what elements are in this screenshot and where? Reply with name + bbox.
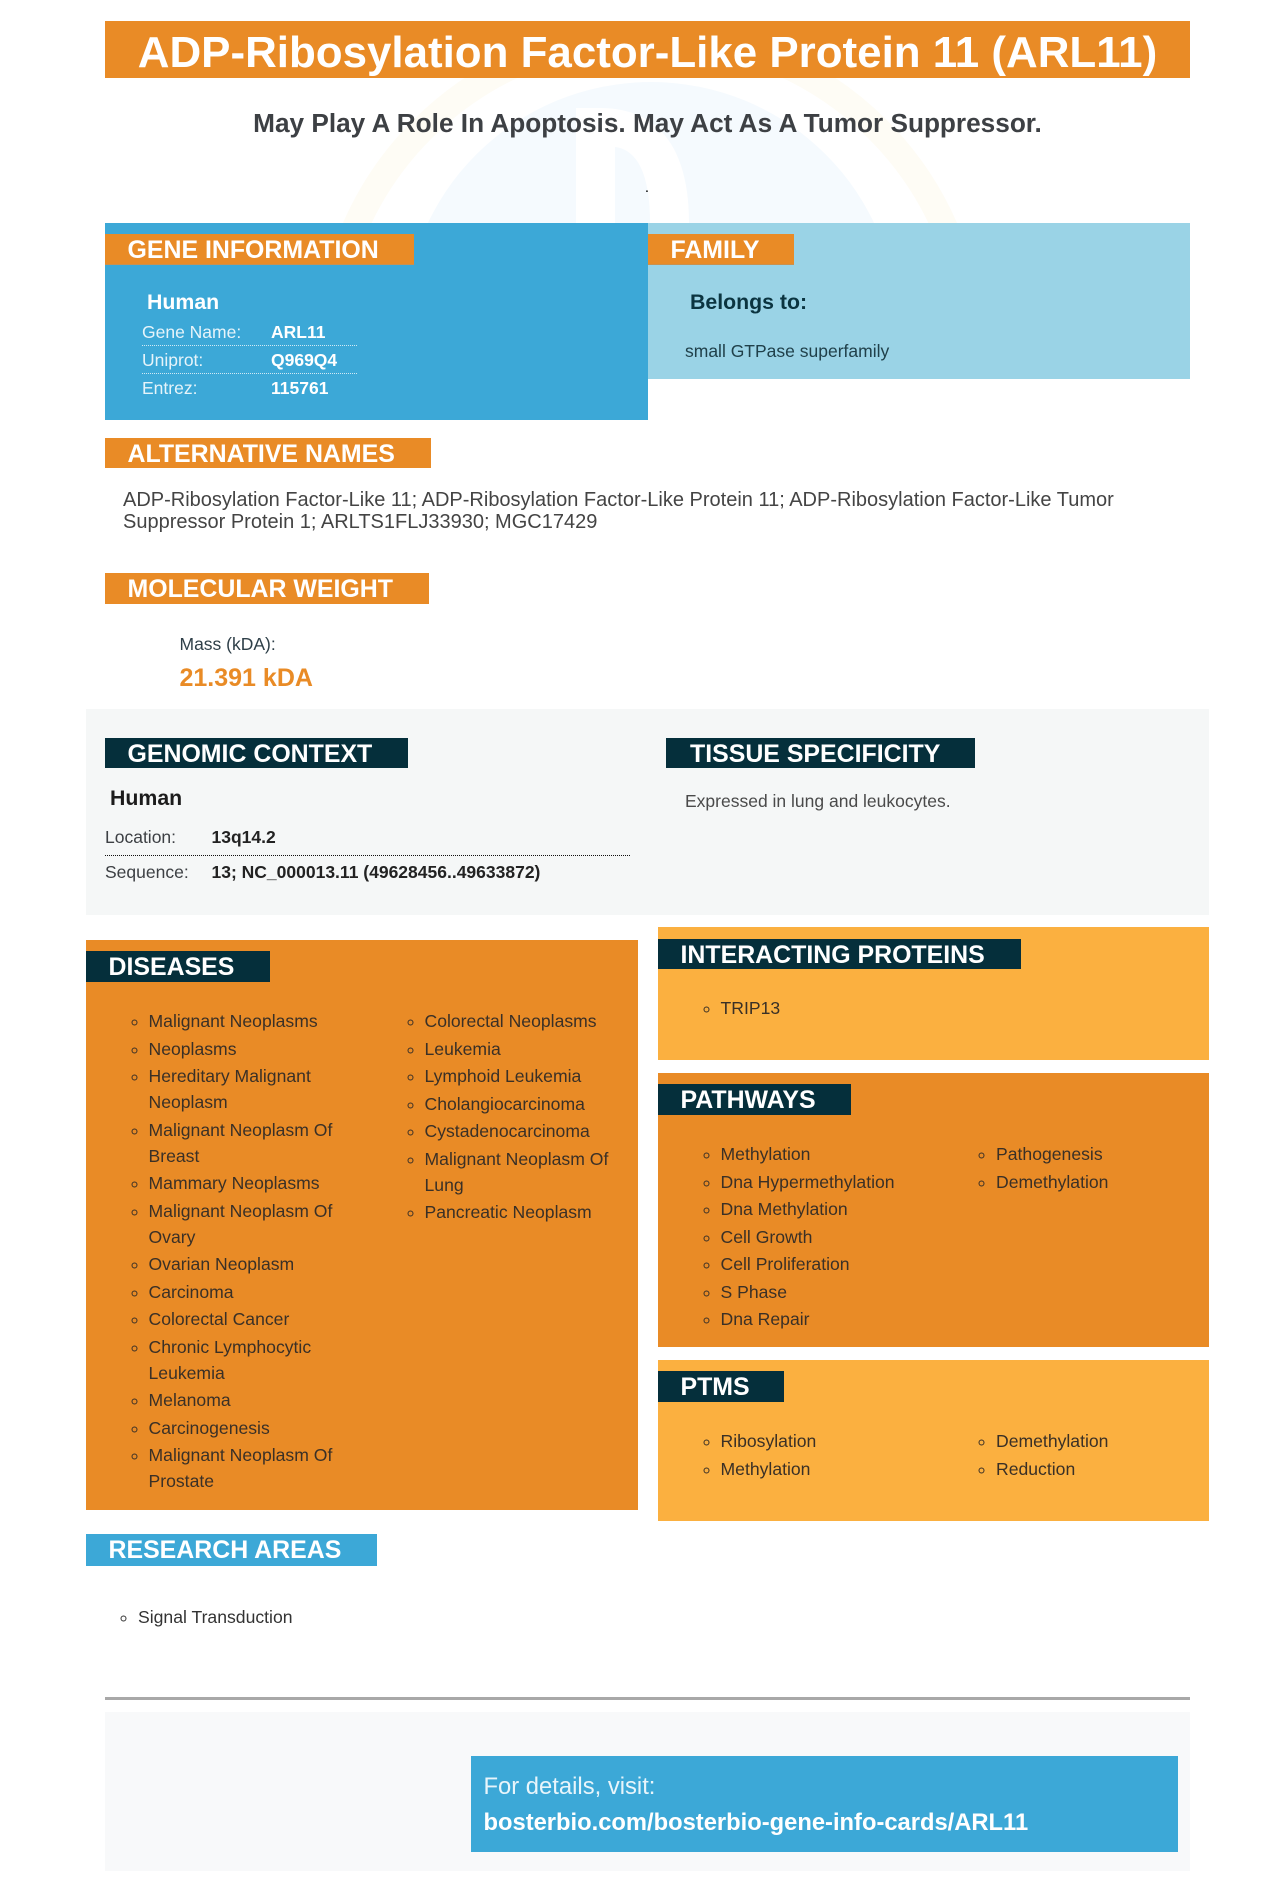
diseases list column 1: Malignant Neoplasms bbox=[148, 1011, 318, 1031]
diseases list column 1: Carcinogenesis bbox=[148, 1418, 270, 1438]
uniprot row: Uniprot: bbox=[142, 350, 203, 370]
diseases list column 2 bbox=[408, 1011, 608, 1222]
diseases list column 1: Breast bbox=[148, 1146, 199, 1166]
ptms list column 2: Reduction bbox=[996, 1459, 1075, 1479]
family value: small GTPase superfamily bbox=[685, 341, 889, 361]
pathways list column 1: Dna Hypermethylation bbox=[720, 1172, 895, 1192]
diseases list column 1: Neoplasms bbox=[148, 1039, 237, 1059]
location row: 13q14.2 bbox=[212, 827, 276, 847]
diseases list column 1: Malignant Neoplasm Of bbox=[148, 1445, 332, 1465]
uniprot row bbox=[142, 348, 357, 374]
species label: Human bbox=[147, 290, 219, 314]
heading: research areas: RESEARCH AREAS bbox=[108, 1536, 341, 1564]
diseases list column 1 bbox=[132, 1011, 332, 1491]
entrez row bbox=[142, 378, 328, 398]
belongs to label: Belongs to: bbox=[690, 290, 807, 314]
diseases list column 2: Lung bbox=[424, 1175, 464, 1195]
heading: ptms bbox=[658, 1371, 784, 1402]
ptms list column 1 bbox=[704, 1431, 816, 1479]
research areas list: Signal Transduction bbox=[138, 1607, 293, 1627]
panel: pathways bbox=[658, 1073, 1209, 1347]
diseases list column 2: Lymphoid Leukemia bbox=[424, 1066, 581, 1086]
diseases list column 1: Prostate bbox=[148, 1471, 214, 1491]
species label: Human bbox=[110, 786, 182, 810]
heading: family: FAMILY bbox=[670, 236, 759, 264]
heading: diseases bbox=[86, 951, 270, 982]
heading: alternative names: ALTERNATIVE NAMES bbox=[128, 440, 395, 468]
diseases list column 1: Chronic Lymphocytic bbox=[148, 1337, 311, 1357]
tissue specificity text: Expressed in lung and leukocytes. bbox=[685, 791, 951, 811]
location row: Location: bbox=[105, 827, 176, 847]
diseases list column 2: Colorectal Neoplasms bbox=[424, 1011, 597, 1031]
alternative names text: ADP-Ribosylation Factor-Like 11; ADP-Ribosylation Factor-Like Protein 11; ADP-Ribosylation Factor-Like Tumor bbox=[123, 489, 1114, 511]
diseases list column 1: Ovary bbox=[148, 1227, 195, 1247]
panel: genomic context and tissue specificity bbox=[86, 709, 1209, 915]
panel: footer bbox=[105, 1712, 1190, 1871]
heading: pathways bbox=[658, 1084, 851, 1115]
pathways list column 2 bbox=[978, 1144, 1108, 1192]
sequence row: 13; NC_000013.11 (49628456..49633872) bbox=[212, 862, 540, 882]
uniprot row: Q969Q4 bbox=[271, 350, 337, 370]
diseases list column 2: Cystadenocarcinoma bbox=[424, 1121, 590, 1141]
dot: . bbox=[645, 179, 649, 196]
title: ADP-Ribosylation Factor-Like Protein 11 (ARL11) bbox=[138, 28, 1157, 77]
heading: family bbox=[648, 234, 794, 265]
diseases list column 1: Leukemia bbox=[148, 1363, 225, 1383]
heading: molecular weight: MOLECULAR WEIGHT bbox=[128, 575, 393, 603]
panel: ptms bbox=[658, 1360, 1209, 1521]
footer divider bbox=[105, 1697, 1190, 1700]
pathways list column 1: Methylation bbox=[720, 1144, 810, 1164]
sequence row: Sequence: bbox=[105, 862, 189, 882]
panel: interacting proteins bbox=[658, 927, 1209, 1060]
heading: interacting proteins: INTERACTING PROTEINS bbox=[680, 941, 985, 969]
diseases list column 1: Melanoma bbox=[148, 1390, 231, 1410]
pathways list column 1: Cell Proliferation bbox=[720, 1254, 850, 1274]
diseases list column 1: Malignant Neoplasm Of bbox=[148, 1201, 332, 1221]
diseases list column 1: Carcinoma bbox=[148, 1282, 234, 1302]
ptms list column 1: Ribosylation bbox=[720, 1431, 816, 1451]
gene name row bbox=[142, 320, 357, 346]
heading: genomic context: GENOMIC CONTEXT bbox=[128, 740, 372, 768]
pathways list column 1: S Phase bbox=[720, 1282, 787, 1302]
panel: family bbox=[648, 223, 1190, 379]
alternative names text: Suppressor Protein 1; ARLTS1FLJ33930; MGC17429 bbox=[123, 511, 597, 533]
mass value: 21.391 kDA bbox=[180, 664, 313, 692]
diseases list column 1: Hereditary Malignant bbox=[148, 1066, 311, 1086]
pathways list column 1: Dna Methylation bbox=[720, 1199, 848, 1219]
gene name row: ARL11 bbox=[271, 322, 325, 342]
pathways list column 1 bbox=[704, 1144, 895, 1329]
diseases list column 2: Cholangiocarcinoma bbox=[424, 1094, 585, 1114]
heading: pathways: PATHWAYS bbox=[680, 1086, 816, 1114]
interacting proteins list: TRIP13 bbox=[720, 998, 780, 1018]
pathways list column 1: Cell Growth bbox=[720, 1227, 812, 1247]
heading: gene information: GENE INFORMATION bbox=[128, 236, 379, 264]
ptms list column 2 bbox=[978, 1431, 1108, 1479]
location row bbox=[105, 824, 630, 856]
diseases list column 1: Mammary Neoplasms bbox=[148, 1173, 320, 1193]
mass label: Mass (kDA): bbox=[180, 634, 276, 654]
watermark logo bbox=[343, 78, 957, 223]
heading: tissue specificity: TISSUE SPECIFICITY bbox=[690, 740, 940, 768]
diseases list column 1: Ovarian Neoplasm bbox=[148, 1254, 294, 1274]
pathways list column 1: Dna Repair bbox=[720, 1309, 810, 1329]
gene name row: Gene Name: bbox=[142, 322, 241, 342]
diseases list column 2: Leukemia bbox=[424, 1039, 501, 1059]
pathways list column 2: Demethylation bbox=[996, 1172, 1108, 1192]
alternative names text bbox=[123, 489, 1114, 533]
diseases list column 1: Colorectal Cancer bbox=[148, 1309, 289, 1329]
panel: gene information bbox=[105, 223, 648, 420]
callout label: For details, visit: bbox=[484, 1773, 655, 1800]
callout: details link bbox=[471, 1756, 1178, 1852]
diseases list column 2: Pancreatic Neoplasm bbox=[424, 1202, 592, 1222]
ptms list column 2: Demethylation bbox=[996, 1431, 1108, 1451]
entrez row: Entrez: bbox=[142, 378, 197, 398]
callout url: bosterbio.com/bosterbio-gene-info-cards/ARL11 bbox=[484, 1810, 1028, 1836]
heading: diseases: DISEASES bbox=[108, 953, 234, 981]
diseases list column 1: Neoplasm bbox=[148, 1092, 228, 1112]
ptms list column 1: Methylation bbox=[720, 1459, 810, 1479]
subtitle: May Play A Role In Apoptosis. May Act As A Tumor Suppressor. bbox=[253, 108, 1042, 138]
pathways list column 2: Pathogenesis bbox=[996, 1144, 1103, 1164]
entrez row: 115761 bbox=[271, 378, 328, 398]
panel: diseases bbox=[86, 940, 638, 1510]
heading: ptms: PTMS bbox=[680, 1373, 750, 1401]
diseases list column 1: Malignant Neoplasm Of bbox=[148, 1120, 332, 1140]
diseases list column 2: Malignant Neoplasm Of bbox=[424, 1149, 608, 1169]
